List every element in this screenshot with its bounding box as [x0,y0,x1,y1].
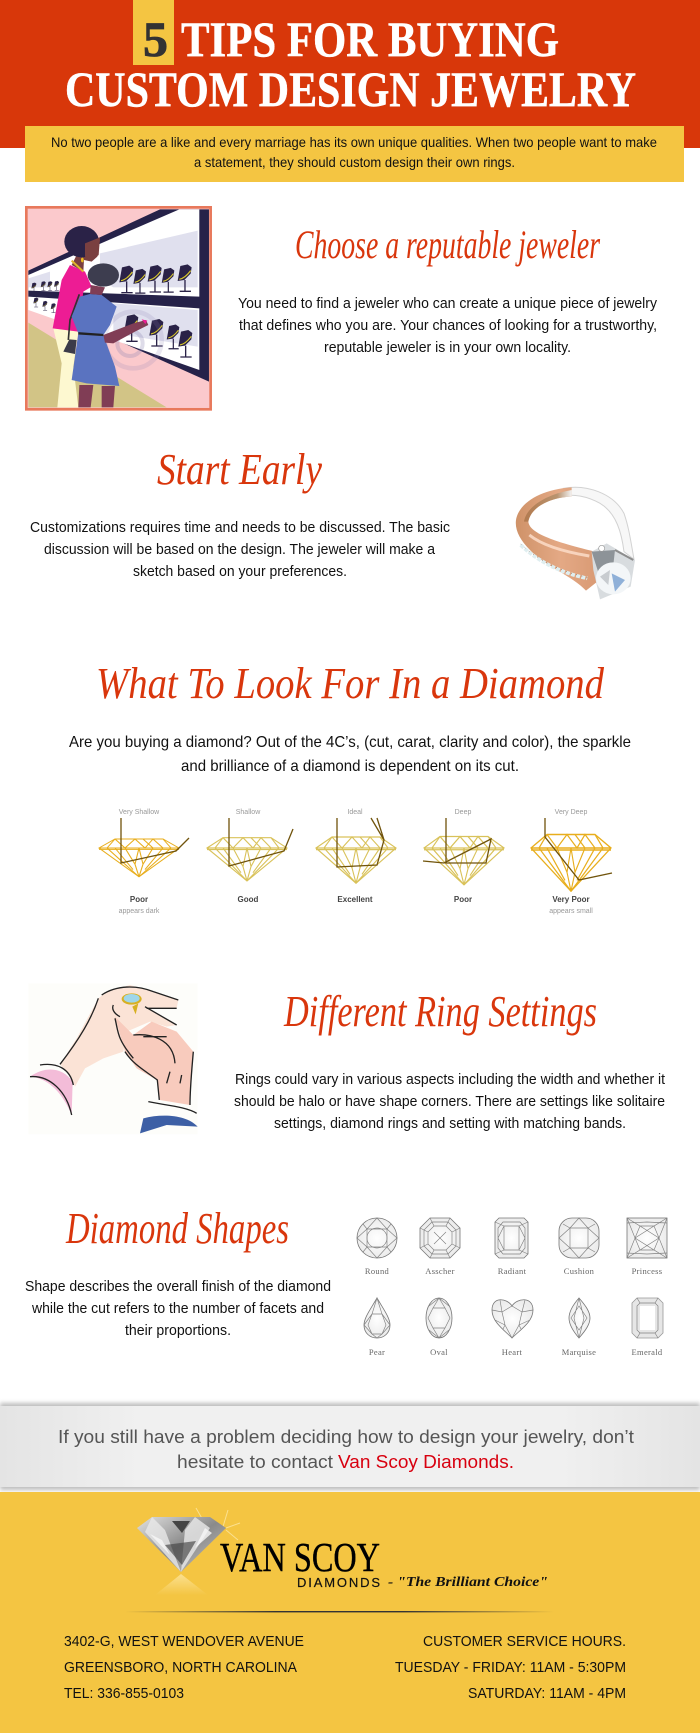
diamond: shallow: Good [238,895,259,904]
logo: van scoy diamonds [137,1508,548,1595]
section: different ring settings [234,987,665,1132]
shape: marquise [562,1298,596,1357]
diamond: very deep: Very Deep [555,809,587,816]
shape: princess [627,1218,667,1276]
body text [234,1072,665,1132]
section: choose a reputable jeweler [238,222,658,356]
shape: heart [492,1300,533,1357]
shape: emerald [632,1298,663,1357]
shape: radiant: Radiant [498,1266,527,1276]
body text: settings, diamond rings and setting with matching bands. [274,1116,626,1132]
body text [30,520,450,580]
diamond: very deep: Very Poor [552,895,590,904]
body text: Rings could vary in various aspects including the width and whether it [235,1072,665,1088]
shape: pear: Pear [369,1347,385,1357]
icon: rose gold diamond ring [516,487,635,599]
diamond: ideal: Excellent [337,895,373,904]
section: diamond shapes [25,1204,331,1339]
section: start early [30,445,450,580]
diamond: ideal [316,809,396,904]
header banner [0,0,700,148]
call to action band: Van Scoy Diamonds. [338,1452,514,1472]
address: 3402-G, WEST WENDOVER AVENUE [64,1633,304,1650]
diamond: very deep [531,809,612,915]
shape: cushion: Cushion [564,1266,595,1276]
body text [69,734,631,775]
diamond: deep: Deep [455,809,471,816]
address [64,1633,304,1702]
body text: discussion will be based on the design. The jeweler will make a [44,542,436,558]
body text [238,296,658,356]
address: GREENSBORO, NORTH CAROLINA [64,1659,297,1676]
shape: cushion [559,1218,599,1276]
shape: radiant [495,1218,528,1276]
service hours: SATURDAY: 11AM - 4PM [468,1685,626,1702]
number badge: 5 [143,11,168,67]
shape: marquise: Marquise [562,1347,596,1357]
diamond: shallow: Shallow [236,809,261,816]
diamond: very shallow: Very Shallow [119,809,160,816]
diamond: very deep: appears small [549,908,593,915]
body text [25,1279,331,1339]
service hours: CUSTOMER SERVICE HOURS. [423,1633,626,1650]
footer panel [0,1492,700,1733]
intro banner: No two people are a like and every marriage has its own unique qualities. When two people want to make [51,134,657,150]
body text: should be halo or have shape corners. There are settings like solitaire [234,1094,665,1110]
chart: diamond shape gallery [357,1218,667,1357]
title [65,11,636,117]
service hours: TUESDAY - FRIDAY: 11AM - 5:30PM [395,1659,626,1676]
title: TIPS FOR BUYING [181,11,559,67]
older woman [53,226,100,407]
sub wordmark: DIAMONDS [297,1575,380,1590]
body text: Are you buying a diamond? Out of the 4C’s, (cut, carat, clarity and color), the sparkle [69,734,631,751]
diamond: very shallow: Poor [130,895,148,904]
service hours [395,1633,626,1702]
body text: and brilliance of a diamond is dependent on its cut. [181,758,519,775]
heading: Diamond Shapes [65,1204,289,1253]
body text: You need to find a jeweler who can create a unique piece of jewelry [238,296,658,312]
number badge [133,0,174,67]
wordmark: VAN SCOY [220,1534,380,1580]
shape: princess: Princess [632,1266,662,1276]
child in blue dress [63,263,148,407]
diamond: deep [423,809,504,904]
shape: round: Round [365,1266,390,1276]
illustration: women shopping at a jewelry display [26,207,211,409]
shape: oval: Oval [430,1347,448,1357]
shape: heart: Heart [502,1347,523,1357]
tagline: - "The Brilliant Choice" [388,1575,548,1590]
diamond: very shallow [99,809,189,915]
necklace busts [31,264,192,357]
heading: Start Early [157,445,322,494]
heading: What To Look For In a Diamond [96,659,605,708]
shape: pear [364,1298,390,1357]
body text: Shape describes the overall finish of the diamond [25,1279,331,1295]
heading: Different Ring Settings [283,987,597,1036]
address: TEL: 336-855-0103 [64,1685,184,1702]
body text: that defines who you are. Your chances of looking for a trustworthy, [239,318,657,334]
body text: their proportions. [125,1323,231,1339]
diamond: very shallow: appears dark [119,908,160,915]
shape: asscher: Asscher [425,1266,455,1276]
diamond: ideal: Ideal [347,809,363,816]
shape: oval [426,1298,452,1357]
shape: round [357,1218,397,1276]
shape: asscher [420,1218,460,1276]
call to action band: If you still have a problem deciding how to design your jewelry, don’t [58,1427,634,1447]
call to action band [0,1403,700,1490]
body text: sketch based on your preferences. [133,564,347,580]
intro banner [25,126,684,182]
diamond: shallow [207,809,293,904]
body text: while the cut refers to the number of facets and [31,1301,324,1317]
diamond: deep: Poor [454,895,472,904]
section: what to look for in a diamond [69,659,631,775]
call to action band: hesitate to contact [177,1452,333,1472]
icon: sparkling diamond [137,1508,240,1595]
intro banner: a statement, they should custom design their own rings. [194,154,515,170]
shape: emerald: Emerald [632,1347,663,1357]
illustration: hands with ring [28,983,198,1134]
body text: reputable jeweler is in your own locality. [324,340,571,356]
body text: Customizations requires time and needs to be discussed. The basic [30,520,450,536]
diagram: diamond cut light paths [99,809,612,915]
